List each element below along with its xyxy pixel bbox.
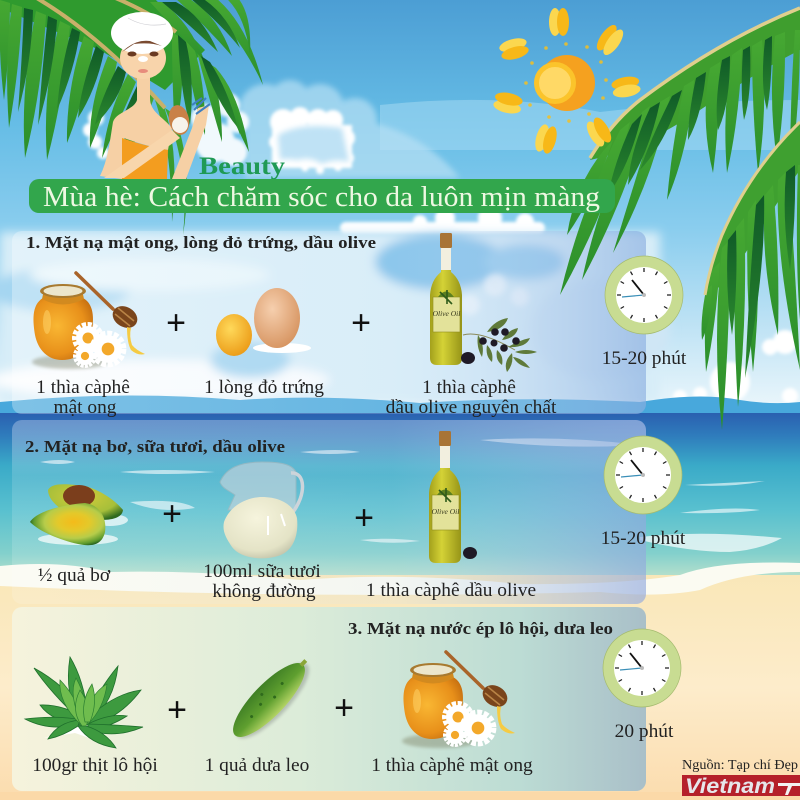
plus sign: + [351, 304, 371, 342]
icon: honey jar [402, 652, 515, 748]
panel 1: honey, egg yolk and olive oil mask [12, 231, 646, 418]
icon: milk jug [220, 462, 303, 558]
label: dầu olive nguyên chất [386, 397, 557, 418]
clouds behind panel 1 [340, 206, 545, 234]
title text: Mùa hè: Cách chăm sóc cho da luôn mịn màng [43, 182, 600, 213]
icon: aloe plant [25, 657, 143, 748]
label: 1 thìa càphê [422, 377, 516, 398]
clouds on right horizon [673, 330, 798, 404]
icon: avocado [30, 484, 128, 545]
palm frond: right upper [560, 8, 800, 295]
panel 2: avocado, milk and olive oil mask [12, 420, 646, 604]
plus sign: + [354, 499, 374, 537]
label: 1 quả dưa leo [205, 755, 309, 776]
label: 1 thìa càphê dầu olive [366, 580, 536, 601]
panel 2 heading: 2. Mặt nạ bơ, sữa tươi, dầu olive [25, 437, 285, 456]
label: mật ong [53, 397, 117, 418]
panel 1 heading: 1. Mặt nạ mật ong, lòng đỏ trứng, dầu olive [26, 233, 376, 252]
plus sign: + [334, 689, 354, 727]
icon: cucumber [223, 650, 320, 748]
clock 1 time label: 15-20 phút [602, 348, 687, 369]
white cloud behind woman [83, 93, 249, 166]
clock 3 [603, 629, 681, 707]
clock 2 [604, 436, 682, 514]
plus sign: + [167, 691, 187, 729]
source credit: Nguồn: Tạp chí Đẹp [682, 757, 798, 772]
panel 1 background [12, 231, 646, 414]
icon: honey jar [32, 273, 145, 369]
label: 100gr thịt lô hội [32, 755, 158, 776]
clock 2 time label: 15-20 phút [601, 528, 686, 549]
sun [492, 8, 642, 155]
panel 3 background [12, 607, 646, 791]
clock 3 time label: 20 phút [615, 721, 674, 742]
panel 3: aloe and cucumber mask [12, 607, 646, 791]
woman with towel [100, 12, 210, 179]
plus sign: + [162, 495, 182, 533]
bumpy white cloud [269, 107, 355, 174]
icon: olive oil bottle [430, 233, 462, 365]
palm frond: right lower [702, 122, 800, 430]
title banner [29, 179, 615, 213]
label: không đường [212, 581, 316, 602]
panel 3 heading: 3. Mặt nạ nước ép lô hội, dưa leo [348, 619, 613, 638]
label: 1 thìa càphê mật ong [371, 755, 533, 776]
label: 1 thìa càphê [36, 377, 130, 398]
label: 1 lòng đỏ trứng [204, 377, 324, 398]
clock 1 [605, 256, 683, 334]
category label: Beauty: Beauty [199, 153, 286, 180]
plus sign: + [166, 304, 186, 342]
Vietnam+ logo: Vietnam [685, 775, 775, 798]
Vietnam+ logo [682, 775, 800, 798]
label: 100ml sữa tươi [203, 561, 321, 582]
icon: olive oil bottle [429, 431, 477, 563]
label: ½ quả bơ [38, 565, 111, 586]
icon: olive branch [461, 318, 537, 372]
icon: egg and yolk [216, 288, 311, 356]
panel 2 background [12, 420, 646, 604]
palm frond: top left [0, 0, 263, 235]
